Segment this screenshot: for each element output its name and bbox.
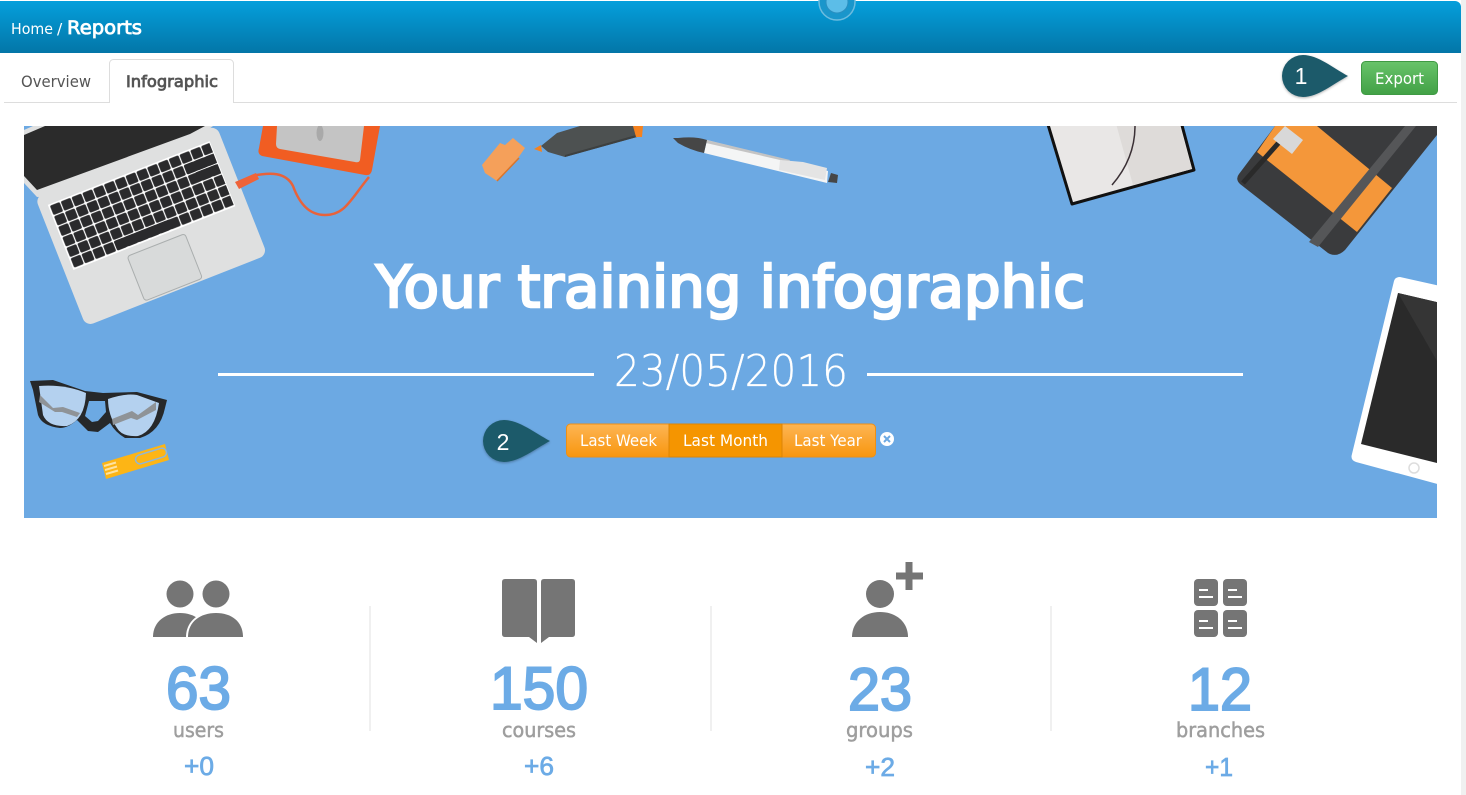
stat: groups: 23 [848,656,912,723]
stat: groups: +2 [865,752,895,782]
stat: branches: 12 [1188,656,1252,723]
stat: users: +0 [184,751,214,781]
stat: courses [490,579,588,781]
stat: groups [846,562,923,782]
icon: branches [1194,579,1247,637]
callout 1: 1 [1295,63,1307,89]
date range buttons: Last Month [683,431,768,450]
icon: clear filter [880,432,894,446]
breadcrumb: / [57,20,63,38]
breadcrumb: Reports [67,17,142,39]
export button [1362,62,1438,94]
page edge shadow [1461,0,1466,795]
icon: pen [673,137,838,183]
header bar [0,0,1461,53]
stat: users: 63 [166,655,231,722]
date range buttons [566,424,876,457]
callout 2 [483,420,550,462]
icon: tablet [1352,277,1445,486]
callout 1 [1282,55,1348,97]
icon: add group [852,562,923,637]
tabs [4,60,1457,104]
title: Your training infographic [375,253,1085,321]
export button: Export [1375,69,1424,88]
stat: branches [1176,579,1265,782]
stat: groups: groups [846,718,913,742]
icon: orange hard drive [235,125,380,215]
tab: infographic [110,60,234,104]
icon: users [153,580,243,637]
stat: courses: 150 [490,655,588,722]
loading indicator [819,0,855,20]
stat: branches: branches [1176,718,1265,742]
icon: book [502,579,575,643]
stat dividers [370,606,1051,731]
date with rules: 23/05/2016 [614,346,848,397]
stat: courses: +6 [524,751,554,781]
icon: glasses [30,380,167,438]
banner [24,118,1445,518]
date range buttons: Last Year [794,431,862,450]
icon: highlighter [482,126,643,181]
date with rules [218,346,1243,397]
icon: tablet cover notebook [1046,118,1194,204]
tab: infographic: Infographic [126,72,218,91]
breadcrumb: Home [11,20,53,38]
stat: branches: +1 [1205,752,1233,782]
date range buttons: Last Week [580,431,658,450]
breadcrumb [11,17,142,39]
callout 2: 2 [497,429,509,455]
icon: notebook [1237,126,1437,255]
stat: courses: courses [502,718,576,742]
stat: users [153,580,243,781]
icon: usb paperclip [102,444,169,479]
icon: laptop [24,126,267,326]
tab: overview: Overview [21,72,91,91]
stat: users: users [173,718,224,742]
